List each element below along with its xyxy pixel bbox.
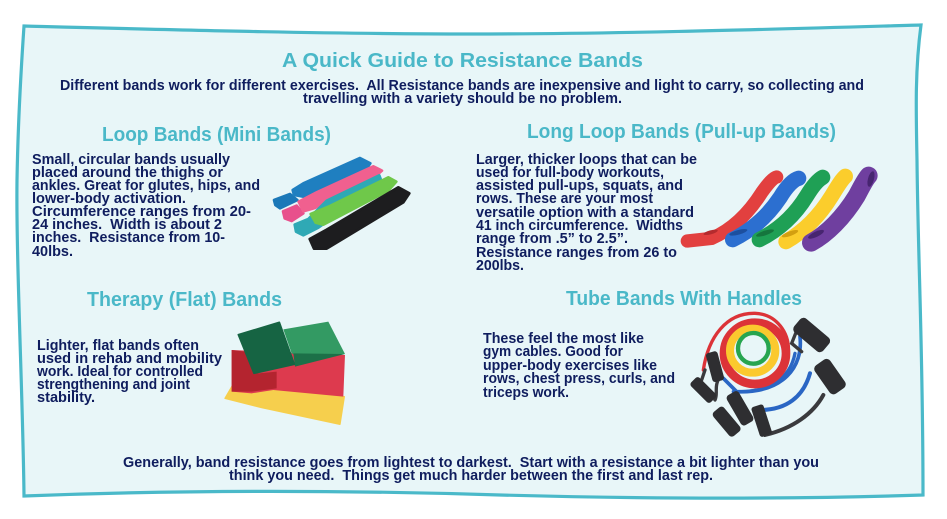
text block: therapy bands: strengthening and joint [37,377,190,393]
image: tube bands with handles [689,313,848,438]
text block: long loop bands: versatile option with a standard [476,205,694,221]
text block: long loop bands: Larger, thicker loops that can be [476,152,697,168]
text block: long loop bands [476,152,697,274]
image: long loop bands [687,170,876,243]
text block: tube bands: triceps work. [483,385,569,401]
footer note: Generally, band resistance goes from lightest to darkest. Start with a resistance a bit lighter than you [123,455,819,471]
footer note: think you need. Things get much harder between the first and last rep. [229,468,713,484]
text block: long loop bands: range from .5” to 2.5”. [476,231,628,247]
intro text: Different bands work for different exercises. All Resistance bands are inexpensive and light to carry, so collecting and [60,78,864,94]
text block: therapy bands: Lighter, flat bands often [37,338,199,354]
heading: tube bands: Tube Bands With Handles [566,287,802,310]
text block: long loop bands: used for full-body workouts, [476,165,664,181]
text block: tube bands: These feel the most like [483,331,644,347]
text block: long loop bands: assisted pull-ups, squats, and [476,178,683,194]
text block: therapy bands [36,338,223,406]
text block: therapy bands: used in rehab and mobility [37,351,223,367]
text block: loop bands: 24 inches. Width is about 2 [32,217,222,233]
text block: long loop bands: 41 inch circumference. Widths [476,218,683,234]
text block: tube bands: rows, chest press, curls, and [483,371,675,387]
footer note [123,455,819,484]
text block: long loop bands: 200lbs. [476,258,524,274]
text block: long loop bands: Resistance ranges from 26 to [476,245,677,261]
text block: therapy bands: stability. [37,390,95,406]
heading: long loop bands: Long Loop Bands (Pull-up Bands) [527,120,836,143]
text block: long loop bands: rows. These are your most [476,191,653,207]
image: loop bands [274,158,409,249]
text block: loop bands: placed around the thighs or [32,165,223,181]
heading: loop bands: Loop Bands (Mini Bands) [102,123,331,146]
text block: loop bands: Small, circular bands usually [32,152,231,168]
intro text [60,78,864,107]
text block: loop bands: Circumference ranges from 20- [32,204,251,220]
text block: therapy bands: work. Ideal for controlled [36,364,203,380]
text block: loop bands [32,152,260,260]
heading: therapy bands: Therapy (Flat) Bands [87,288,282,311]
text block: loop bands: inches. Resistance from 10- [32,230,225,246]
title: A Quick Guide to Resistance Bands [282,49,643,72]
text block: loop bands: ankles. Great for glutes, hips, and [32,178,260,194]
text block: tube bands [483,331,675,401]
intro text: travelling with a variety should be no problem. [303,91,622,107]
text block: loop bands: lower-body activation. [32,191,186,207]
text block: loop bands: 40lbs. [32,244,73,260]
image: therapy bands [225,322,345,424]
text block: tube bands: upper-body exercises like [483,358,657,374]
text block: tube bands: gym cables. Good for [483,344,623,360]
